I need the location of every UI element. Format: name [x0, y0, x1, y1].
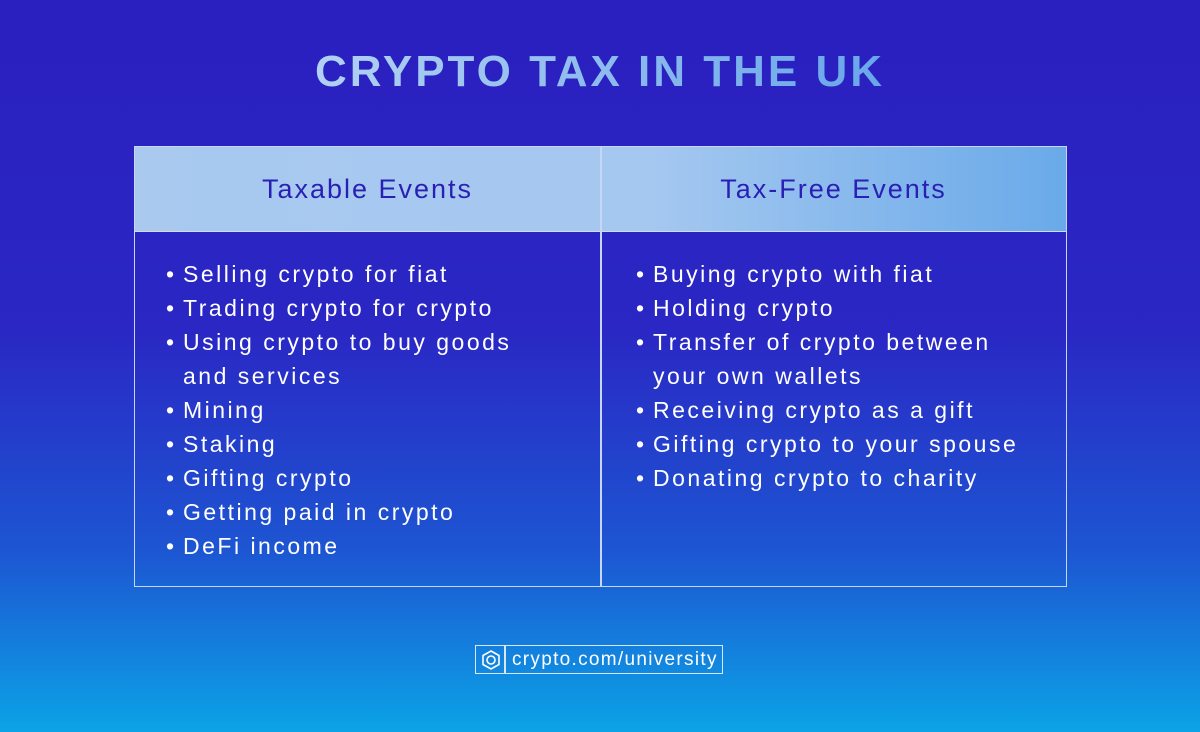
list: tax-free events: Transfer of crypto between: [653, 329, 991, 355]
list: taxable events: [166, 261, 511, 559]
list: taxable events: DeFi income: [183, 533, 340, 559]
table panel: [134, 146, 1067, 587]
list: taxable events: and services: [183, 363, 342, 389]
heading: taxable: Taxable Events: [262, 174, 473, 204]
url text: crypto.com/university: [512, 649, 718, 670]
list: tax-free events: [636, 261, 1018, 491]
list: tax-free events: Donating crypto to charity: [653, 465, 979, 491]
list: tax-free events: Gifting crypto to your spouse: [653, 431, 1018, 457]
list: tax-free events: Receiving crypto as a gift: [653, 397, 975, 423]
list: tax-free events: your own wallets: [653, 363, 863, 389]
list: taxable events: Gifting crypto: [183, 465, 354, 491]
header row: [135, 147, 1066, 232]
list: taxable events: Using crypto to buy goods: [183, 329, 511, 355]
heading: tax-free: Tax-Free Events: [720, 174, 947, 204]
list: tax-free events: Buying crypto with fiat: [653, 261, 934, 287]
list: taxable events: Getting paid in crypto: [183, 499, 455, 525]
list: taxable events: Mining: [183, 397, 266, 423]
title: CRYPTO TAX IN THE UK: [315, 47, 885, 96]
list: taxable events: Trading crypto for crypto: [183, 295, 494, 321]
list: tax-free events: Holding crypto: [653, 295, 835, 321]
list: taxable events: Selling crypto for fiat: [183, 261, 449, 287]
list: taxable events: Staking: [183, 431, 277, 457]
icon: crypto.com hex: [482, 650, 500, 670]
footer logo: [475, 645, 723, 674]
